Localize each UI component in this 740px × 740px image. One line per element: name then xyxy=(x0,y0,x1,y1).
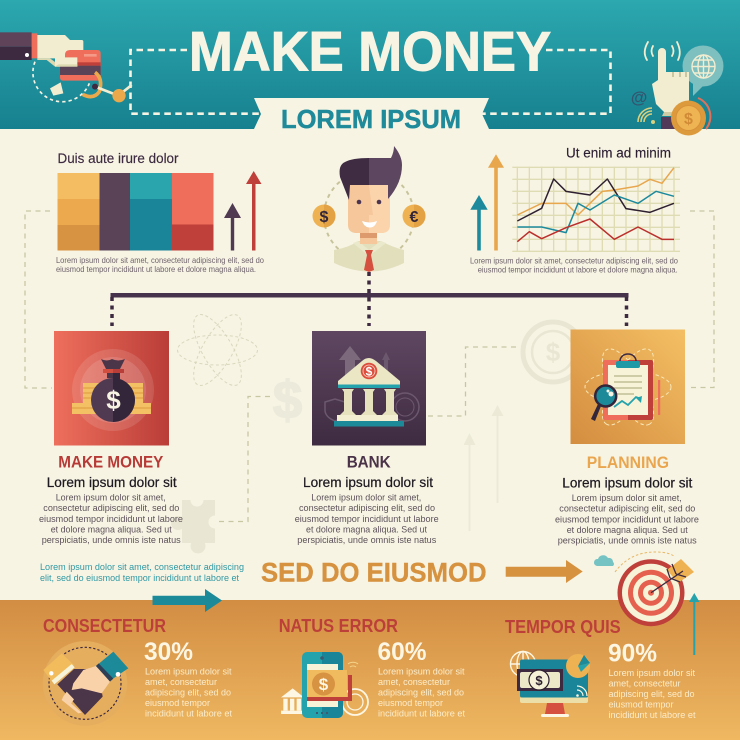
body text: eiusmod tempor incididunt ut labore xyxy=(39,514,183,525)
teal note text: Lorem ipsum dolor sit amet, consectetur adipiscing xyxy=(40,562,244,573)
description: eiusmod tempor xyxy=(145,698,211,709)
subheading: Lorem ipsum dolor sit xyxy=(562,474,692,490)
icon: clipboard square xyxy=(570,330,685,444)
ribbon xyxy=(254,98,489,129)
heading: TEMPOR QUIS xyxy=(505,617,621,637)
line chart xyxy=(512,167,680,252)
teal note text: elit, sed do eiusmod tempor incididunt ut labore et xyxy=(40,573,239,584)
percentage: 90% xyxy=(608,640,657,668)
body text xyxy=(39,492,183,546)
arrow: orange right xyxy=(506,560,583,583)
description xyxy=(608,668,696,721)
icon: monitor with cash xyxy=(510,652,590,717)
body text: eiusmod tempor incididunt ut labore xyxy=(555,514,699,525)
body text: et dolore magna aliqua. Sed ut xyxy=(567,525,688,536)
heading: PLANNING xyxy=(587,454,669,472)
dark arrow xyxy=(224,203,241,250)
heading: MAKE MONEY xyxy=(58,454,163,472)
body text: Lorem ipsum dolor sit amet, xyxy=(311,492,421,504)
description: incididunt ut labore et xyxy=(608,710,696,721)
icon: phone with money: $ xyxy=(319,675,329,694)
red arrow xyxy=(246,171,262,250)
faint background icons xyxy=(171,308,583,554)
panel: natus error xyxy=(279,616,465,720)
chart caption xyxy=(470,256,678,274)
subheading: Lorem ipsum dolor sit xyxy=(303,474,433,490)
description: eiusmod tempor xyxy=(608,700,674,710)
body text: Lorem ipsum dolor sit amet, xyxy=(56,492,166,504)
left chart panel xyxy=(56,151,264,274)
chart heading: Duis aute irure dolor xyxy=(58,151,179,166)
icon: bank square: $ xyxy=(366,364,373,378)
body text: consectetur adipiscing elit, sed do xyxy=(559,503,695,514)
panel: make money xyxy=(39,331,183,546)
body text: perspiciatis, unde omnis iste natus xyxy=(558,535,697,546)
org connector bar xyxy=(110,272,628,326)
description: incididunt ut labore et xyxy=(378,708,465,720)
icon: touch hand, globe and coin: @ xyxy=(631,88,647,107)
faint background icons: $ xyxy=(273,371,302,430)
faint background icons: $ xyxy=(546,337,561,367)
icon: money bag square: $ xyxy=(106,385,121,415)
businessman portrait xyxy=(312,146,426,272)
footer band xyxy=(0,600,740,740)
icon: phone with money xyxy=(281,652,368,718)
body text: consectetur adipiscing elit, sed do xyxy=(299,503,435,514)
right line chart panel xyxy=(470,146,680,274)
subtitle: LOREM IPSUM xyxy=(281,104,461,134)
chart caption: Lorem ipsum dolor sit amet, consectetur adipiscing elit, sed do xyxy=(56,255,264,265)
teal note text xyxy=(40,562,244,584)
body text: et dolore magna aliqua. Sed ut xyxy=(51,524,172,536)
panel: consectetur xyxy=(43,616,232,726)
body text xyxy=(555,493,699,546)
description: Lorem ipsum dolor sit xyxy=(608,668,695,679)
description: adipiscing elit, sed do xyxy=(145,688,231,698)
description: adipiscing elit, sed do xyxy=(378,688,464,698)
description xyxy=(378,666,465,720)
panel: planning xyxy=(555,330,699,546)
description: Lorem ipsum dolor sit xyxy=(145,666,232,678)
description: amet, consectetur xyxy=(145,677,218,688)
panel: tempor quis xyxy=(505,617,696,721)
arrow: teal right xyxy=(152,589,222,612)
section heading: SED DO EIUSMOD xyxy=(261,558,486,588)
description: amet, consectetur xyxy=(378,677,451,688)
chart caption xyxy=(56,255,264,274)
header band xyxy=(0,0,740,129)
icon: monitor with cash: $ xyxy=(535,673,543,688)
icon: touch hand, globe and coin xyxy=(631,42,724,136)
euro coin: € xyxy=(410,209,419,226)
description xyxy=(145,666,232,720)
chart heading: Ut enim ad minim xyxy=(566,146,671,160)
title: MAKE MONEY xyxy=(189,20,551,82)
panel: bank xyxy=(295,331,439,546)
heading: NATUS ERROR xyxy=(279,616,398,636)
arrow: teal up xyxy=(689,593,700,655)
icon: target with arrow xyxy=(615,552,694,626)
body text: eiusmod tempor incididunt ut labore xyxy=(295,514,439,525)
description: eiusmod tempor xyxy=(378,698,444,709)
percentage: 60% xyxy=(378,638,426,666)
body text: perspiciatis, unde omnis iste natus xyxy=(297,535,436,546)
chart caption: eiusmod tempor incididunt ut labore et dolore magna aliqua. xyxy=(56,264,256,274)
icon: money bag square xyxy=(54,331,169,446)
dashed connector lines xyxy=(25,211,714,522)
icon: hand with credit card xyxy=(0,32,132,102)
icon: bank square xyxy=(312,331,426,446)
subheading: Lorem ipsum dolor sit xyxy=(47,474,177,490)
body text: consectetur adipiscing elit, sed do xyxy=(43,503,179,514)
body text: perspiciatis, unde omnis iste natus xyxy=(42,535,181,546)
teal arrow xyxy=(470,195,488,250)
description: Lorem ipsum dolor sit xyxy=(378,666,465,678)
description: adipiscing elit, sed do xyxy=(608,689,694,700)
icon: handshake xyxy=(43,641,128,726)
description: incididunt ut labore et xyxy=(145,708,232,720)
chart caption: Lorem ipsum dolor sit amet, consectetur adipiscing elit, sed do xyxy=(470,256,678,266)
percentage: 30% xyxy=(144,638,193,666)
header dashed frame xyxy=(130,50,610,114)
heading: CONSECTETUR xyxy=(43,616,166,636)
dollar coin: $ xyxy=(320,209,329,226)
stacked colour bars xyxy=(58,173,214,250)
orange arrow xyxy=(488,154,504,250)
description: amet, consectetur xyxy=(608,678,681,690)
body text xyxy=(295,492,439,546)
icon: touch hand, globe and coin: $ xyxy=(684,111,693,128)
heading: BANK xyxy=(347,454,391,472)
chart caption: eiusmod tempor incididunt ut labore et dolore magna aliqua. xyxy=(478,264,678,274)
body text: et dolore magna aliqua. Sed ut xyxy=(306,524,427,536)
icon: cloud xyxy=(594,555,614,566)
body text: Lorem ipsum dolor sit amet, xyxy=(572,493,682,504)
